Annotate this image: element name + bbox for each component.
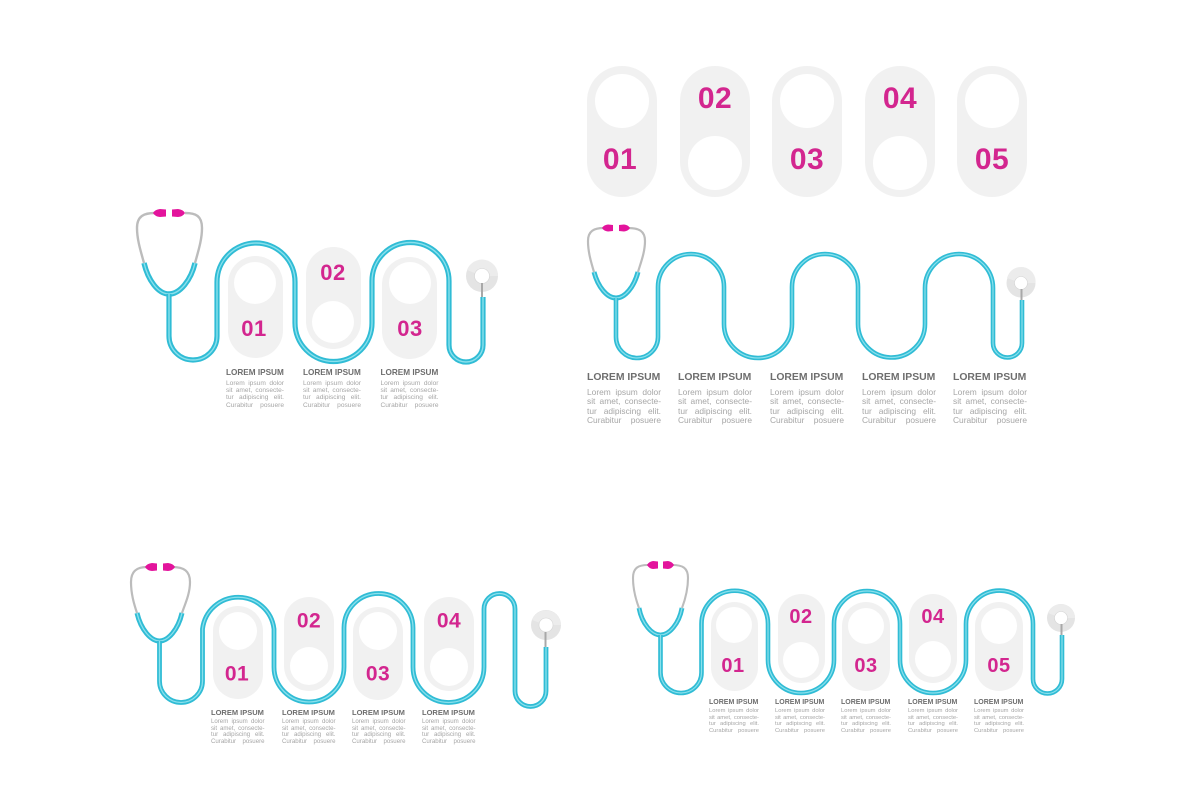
text block 01: tur adipiscing elit. bbox=[587, 406, 661, 416]
text block 04: sit amet, consecte- bbox=[908, 715, 958, 721]
text block 01: LOREM IPSUM bbox=[587, 372, 660, 383]
text block 03: tur adipiscing elit. bbox=[380, 394, 438, 401]
text block 04: Lorem ipsum dolor bbox=[908, 708, 958, 714]
text block 02: Curabitur posuere bbox=[775, 728, 825, 734]
text block 05: LOREM IPSUM bbox=[974, 699, 1023, 706]
text block 04 bbox=[908, 699, 958, 734]
text block 02: sit amet, consecte- bbox=[678, 396, 752, 406]
icon: stethoscope headset bbox=[131, 563, 190, 641]
pill 05 bbox=[975, 602, 1023, 691]
text block 01: Lorem ipsum dolor bbox=[211, 718, 264, 725]
text block 02: sit amet, consecte- bbox=[282, 724, 336, 732]
text block 03: Lorem ipsum dolor bbox=[841, 708, 891, 714]
text block 03: LOREM IPSUM bbox=[841, 699, 890, 706]
text block 02: LOREM IPSUM bbox=[303, 368, 361, 377]
text block 03: Curabitur posuere bbox=[380, 402, 438, 409]
panel: five-step stethoscope timeline bbox=[632, 561, 1075, 734]
text block 04 bbox=[422, 708, 476, 745]
text block 03: Lorem ipsum dolor bbox=[770, 387, 844, 397]
text block 05: tur adipiscing elit. bbox=[953, 406, 1027, 416]
text block 01: tur adipiscing elit. bbox=[709, 721, 759, 727]
icon: chest piece bbox=[1006, 267, 1036, 301]
text block 03 bbox=[380, 368, 438, 409]
text block 02: LOREM IPSUM bbox=[282, 708, 335, 716]
text block 02: tur adipiscing elit. bbox=[282, 731, 336, 738]
pill 03 bbox=[382, 257, 437, 359]
text block 01: Lorem ipsum dolor bbox=[587, 387, 661, 397]
icon: chest piece bbox=[531, 610, 561, 648]
text block 05 bbox=[974, 699, 1024, 734]
text block 03: Curabitur posuere bbox=[352, 738, 406, 745]
pill 04: 04 bbox=[437, 610, 461, 632]
text block 04: Curabitur posuere bbox=[422, 738, 476, 745]
pill 03: 03 bbox=[366, 662, 390, 686]
text block 02: Curabitur posuere bbox=[282, 738, 336, 745]
text block 03: LOREM IPSUM bbox=[770, 372, 843, 383]
text block 01 bbox=[211, 708, 264, 745]
text block 02: tur adipiscing elit. bbox=[678, 406, 752, 416]
text block 04 bbox=[862, 372, 936, 425]
text block 01 bbox=[709, 699, 759, 734]
tube bbox=[660, 591, 1062, 694]
text block 02 bbox=[282, 708, 336, 745]
text block 05: tur adipiscing elit. bbox=[974, 721, 1024, 727]
pill 02 bbox=[284, 597, 334, 691]
pill 05 bbox=[957, 66, 1027, 197]
text block 03 bbox=[352, 708, 406, 745]
text block 03: Lorem ipsum dolor bbox=[380, 380, 438, 387]
text block 01: sit amet, consecte- bbox=[587, 396, 661, 406]
text block 05: Curabitur posuere bbox=[953, 415, 1027, 425]
text block 03: tur adipiscing elit. bbox=[352, 731, 406, 738]
panel: four-step stethoscope timeline bbox=[130, 563, 561, 745]
pill 01: 01 bbox=[225, 662, 249, 686]
text block 01: LOREM IPSUM bbox=[226, 368, 284, 377]
pill 03: 03 bbox=[397, 316, 423, 341]
pill 02 bbox=[778, 594, 825, 683]
text block 05: Lorem ipsum dolor bbox=[974, 708, 1024, 714]
text block 02: LOREM IPSUM bbox=[678, 372, 751, 383]
icon: stethoscope headset bbox=[137, 209, 202, 294]
pill 02: 02 bbox=[698, 82, 732, 115]
text block 01: sit amet, consecte- bbox=[226, 387, 284, 394]
text block 04: sit amet, consecte- bbox=[862, 396, 936, 406]
pill 02 bbox=[680, 66, 750, 197]
text block 01: Curabitur posuere bbox=[709, 728, 759, 734]
text block 02: tur adipiscing elit. bbox=[303, 394, 361, 401]
icon: stethoscope headset bbox=[588, 224, 645, 298]
text block 04: sit amet, consecte- bbox=[422, 724, 476, 732]
pill 05: 05 bbox=[987, 655, 1011, 677]
text block 03: LOREM IPSUM bbox=[380, 368, 438, 377]
text block 04: tur adipiscing elit. bbox=[422, 731, 476, 738]
text block 03: sit amet, consecte- bbox=[841, 715, 891, 721]
text block 04: Curabitur posuere bbox=[862, 415, 936, 425]
text block 03 bbox=[770, 372, 844, 425]
icon: stethoscope headset bbox=[633, 561, 688, 635]
text block 01: Curabitur posuere bbox=[211, 738, 264, 745]
text block 01: tur adipiscing elit. bbox=[226, 394, 284, 401]
text block 01: sit amet, consecte- bbox=[211, 724, 264, 732]
text block 04: LOREM IPSUM bbox=[908, 699, 957, 706]
tube bbox=[160, 594, 546, 706]
text block 02: LOREM IPSUM bbox=[775, 699, 824, 706]
pill 01 bbox=[213, 606, 263, 699]
pill 03 bbox=[353, 607, 403, 700]
text block 01 bbox=[587, 372, 661, 425]
panel: five-step stethoscope timeline with separate pills bbox=[586, 66, 1036, 425]
tube bbox=[169, 242, 483, 362]
pill 01 bbox=[228, 256, 283, 358]
pill 03: 03 bbox=[854, 655, 878, 677]
text block 03: tur adipiscing elit. bbox=[770, 406, 844, 416]
pill 05: 05 bbox=[975, 143, 1009, 176]
text block 03: Curabitur posuere bbox=[770, 415, 844, 425]
pill 01 bbox=[587, 66, 657, 197]
text block 03: sit amet, consecte- bbox=[770, 396, 844, 406]
text block 03: Lorem ipsum dolor bbox=[352, 718, 406, 725]
text block 02 bbox=[775, 699, 825, 734]
pill 02 bbox=[306, 247, 361, 349]
text block 04: Curabitur posuere bbox=[908, 728, 958, 734]
text block 03 bbox=[841, 699, 891, 734]
text block 04: LOREM IPSUM bbox=[862, 372, 935, 383]
text block 02: Curabitur posuere bbox=[303, 402, 361, 409]
pill 02: 02 bbox=[789, 606, 813, 628]
pill 01 bbox=[711, 602, 758, 691]
pill 03 bbox=[772, 66, 842, 197]
text block 02: Lorem ipsum dolor bbox=[303, 380, 361, 387]
icon: chest piece bbox=[1047, 604, 1075, 636]
text block 05: Lorem ipsum dolor bbox=[953, 387, 1027, 397]
text block 01: LOREM IPSUM bbox=[709, 699, 758, 706]
text block 01: Lorem ipsum dolor bbox=[226, 380, 284, 387]
text block 05: sit amet, consecte- bbox=[974, 715, 1024, 721]
text block 03: sit amet, consecte- bbox=[352, 724, 406, 732]
text block 02: sit amet, consecte- bbox=[303, 387, 361, 394]
text block 03: Curabitur posuere bbox=[841, 728, 891, 734]
pill 04: 04 bbox=[921, 606, 945, 628]
text block 01: LOREM IPSUM bbox=[211, 708, 264, 716]
tube bbox=[616, 254, 1022, 358]
text block 05: sit amet, consecte- bbox=[953, 396, 1027, 406]
text block 02: Lorem ipsum dolor bbox=[775, 708, 825, 714]
text block 04: tur adipiscing elit. bbox=[862, 406, 936, 416]
text block 04: Lorem ipsum dolor bbox=[422, 718, 476, 725]
pill 04 bbox=[865, 66, 935, 197]
pill 03: 03 bbox=[790, 143, 824, 176]
text block 05 bbox=[953, 372, 1027, 425]
text block 04: LOREM IPSUM bbox=[422, 708, 475, 716]
icon: chest piece bbox=[466, 260, 498, 298]
text block 03: tur adipiscing elit. bbox=[841, 721, 891, 727]
pill 04: 04 bbox=[883, 82, 917, 115]
text block 02: sit amet, consecte- bbox=[775, 715, 825, 721]
text block 02: Curabitur posuere bbox=[678, 415, 752, 425]
text block 01 bbox=[226, 368, 284, 409]
text block 05: LOREM IPSUM bbox=[953, 372, 1026, 383]
text block 04: Lorem ipsum dolor bbox=[862, 387, 936, 397]
text block 01: Curabitur posuere bbox=[226, 402, 284, 409]
text block 01: Lorem ipsum dolor bbox=[709, 708, 759, 714]
pill 02: 02 bbox=[297, 610, 321, 632]
text block 02: tur adipiscing elit. bbox=[775, 721, 825, 727]
pill 04 bbox=[909, 594, 957, 683]
pill 01: 01 bbox=[721, 655, 745, 677]
text block 02 bbox=[678, 372, 752, 425]
text block 05: Curabitur posuere bbox=[974, 728, 1024, 734]
pill 03 bbox=[842, 602, 890, 691]
text block 04: tur adipiscing elit. bbox=[908, 721, 958, 727]
text block 01: Curabitur posuere bbox=[587, 415, 661, 425]
text block 01: tur adipiscing elit. bbox=[211, 731, 264, 738]
text block 02: Lorem ipsum dolor bbox=[282, 718, 336, 725]
pill 01: 01 bbox=[241, 316, 267, 341]
pill 02: 02 bbox=[320, 260, 346, 285]
text block 01: sit amet, consecte- bbox=[709, 715, 759, 721]
panel: three-step stethoscope timeline bbox=[136, 209, 498, 409]
text block 03: LOREM IPSUM bbox=[352, 708, 405, 716]
text block 02: Lorem ipsum dolor bbox=[678, 387, 752, 397]
text block 03: sit amet, consecte- bbox=[380, 387, 438, 394]
pill 01: 01 bbox=[603, 143, 637, 176]
text block 02 bbox=[303, 368, 361, 409]
pill 04 bbox=[424, 597, 474, 691]
